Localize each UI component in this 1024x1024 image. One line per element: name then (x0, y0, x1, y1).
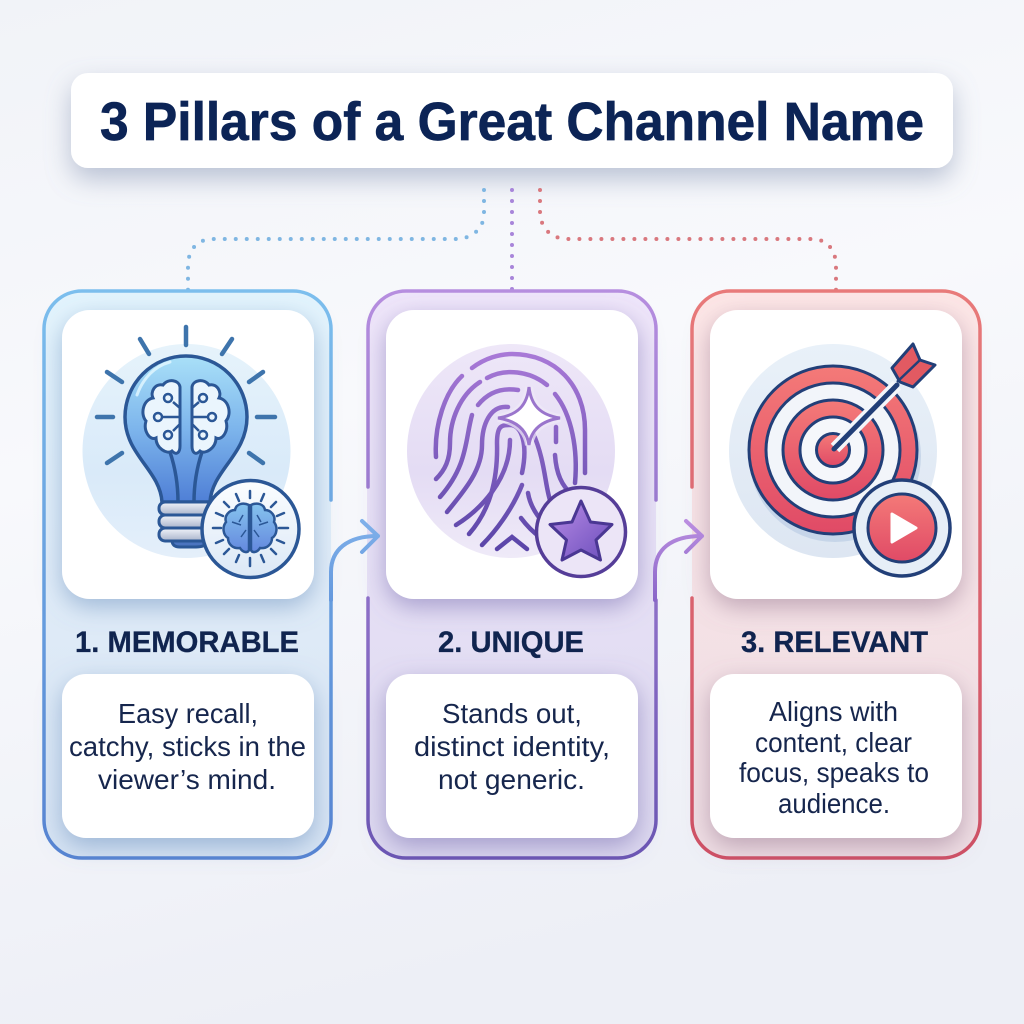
badge: play button (854, 480, 950, 576)
dotted connector: relevant (540, 190, 836, 291)
description card: memorable: Easy recall, (118, 698, 258, 729)
description card: unique: distinct identity, (414, 731, 610, 762)
dotted connector: unique (510, 190, 514, 290)
description card: unique: not generic. (438, 764, 585, 795)
arrow: unique to relevant (655, 521, 702, 600)
description card: relevant: content, clear (755, 727, 912, 758)
panel 3 outline (692, 291, 980, 858)
panel 1 outline (44, 291, 331, 858)
icon card: fingerprint (386, 310, 638, 599)
heading: unique: 2. UNIQUE (438, 626, 584, 659)
badge: star (536, 488, 626, 576)
panel 2 outline (368, 291, 656, 858)
icon: lightbulb with brain (82, 327, 299, 578)
icon: fingerprint with sparkle (407, 344, 626, 576)
description card: relevant: focus, speaks to (739, 757, 929, 788)
badge: mini brain (202, 480, 299, 578)
panel: unique (367, 291, 656, 858)
icon card: target (710, 310, 962, 599)
description card: memorable (62, 674, 314, 838)
arrow: memorable to unique (331, 521, 378, 600)
description card: unique (386, 674, 638, 838)
description card: unique: Stands out, (442, 698, 582, 729)
icon card: lightbulb (62, 310, 314, 599)
panel: relevant (692, 291, 980, 858)
dotted connector: memorable (188, 190, 484, 291)
icon: target with arrow (729, 344, 950, 576)
heading: memorable: 1. MEMORABLE (75, 626, 299, 659)
description card: relevant: Aligns with (769, 696, 898, 727)
description card: memorable: catchy, sticks in the (69, 731, 306, 762)
heading: relevant: 3. RELEVANT (741, 626, 928, 659)
description card: relevant: audience. (778, 788, 890, 819)
description card: relevant (710, 674, 962, 838)
title banner (71, 73, 953, 168)
panel: memorable (44, 291, 331, 858)
title: 3 Pillars of a Great Channel Name (100, 92, 924, 152)
description card: memorable: viewer’s mind. (98, 764, 276, 795)
